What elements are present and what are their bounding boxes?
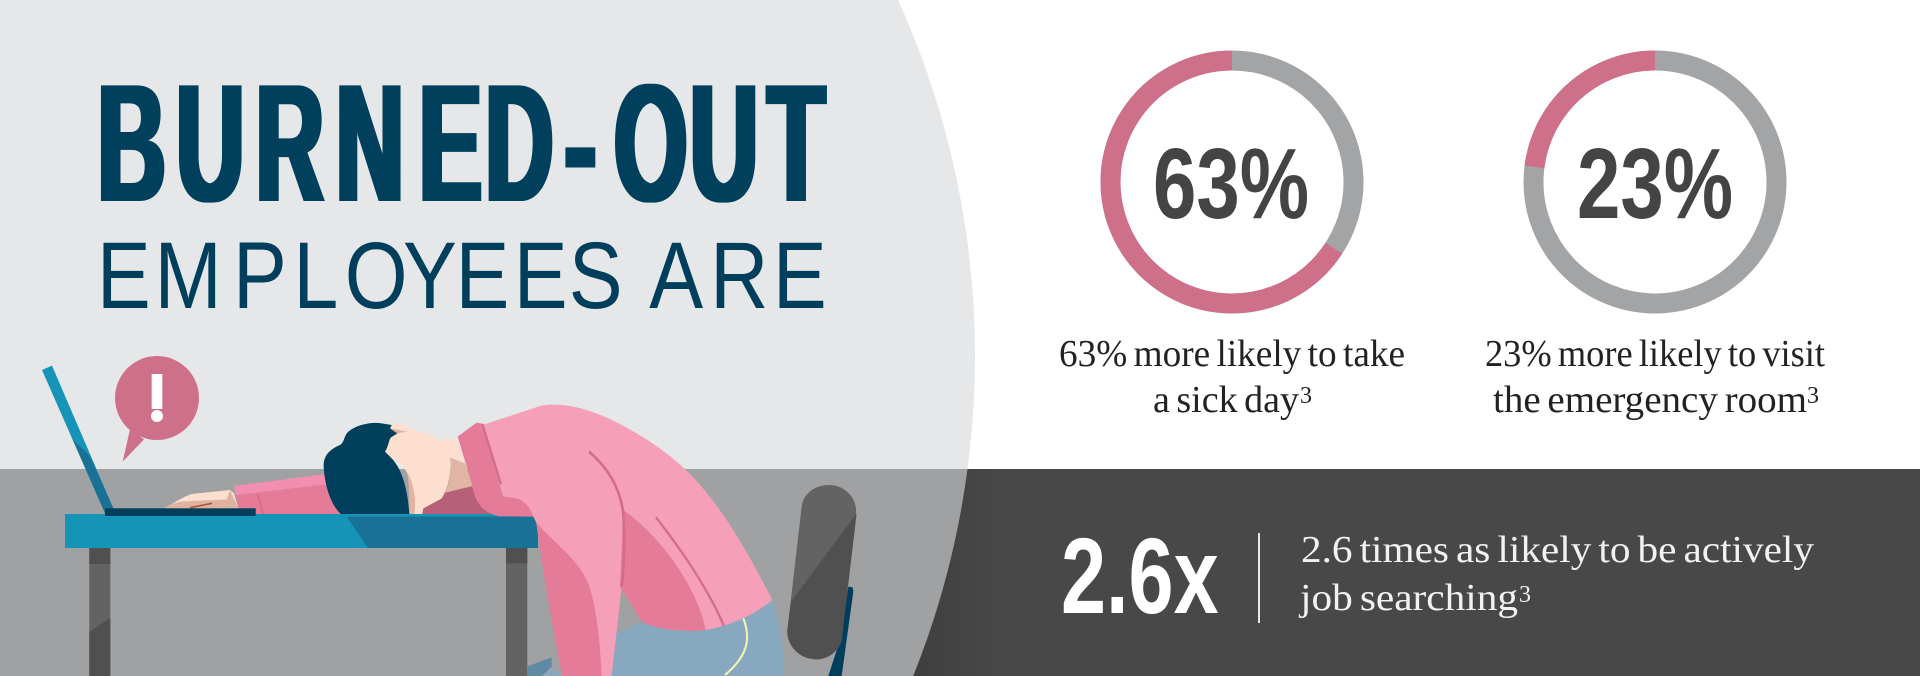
- heading: burned-out: BURNED-OUT: [98, 49, 825, 237]
- label: job searching: [1298, 529, 1814, 619]
- stat: 2.6x: 2.6x: [1061, 517, 1219, 637]
- heading: employees are: EMPLOYEES ARE: [97, 222, 827, 328]
- label: sick day: 3: [1300, 383, 1312, 409]
- divider: [1258, 533, 1260, 623]
- label: emergency room: 23% more likely to visit: [1485, 333, 1825, 375]
- jeans: [527, 600, 783, 676]
- panel: dark bottom band: [0, 469, 1920, 676]
- icon: laptop screen: [42, 366, 113, 513]
- label: sick day: [1059, 333, 1405, 421]
- label: emergency room: 3: [1807, 383, 1819, 409]
- desk legs: [89, 548, 527, 676]
- label: emergency room: the emergency room: [1493, 379, 1807, 421]
- title: [97, 49, 827, 328]
- number: 23%: 23%: [1577, 129, 1733, 240]
- stat: 23% ring: [1534, 60, 1776, 304]
- icon: chair: [787, 485, 857, 676]
- label: sick day: a sick day: [1153, 379, 1299, 421]
- panel: grey floor inside circle: [0, 469, 968, 676]
- jacket: [458, 405, 772, 676]
- label: sick day: 63% more likely to take: [1059, 333, 1405, 375]
- label: emergency room: [1485, 333, 1825, 421]
- jacket and jeans: [458, 405, 783, 676]
- arm and hand: [165, 471, 347, 516]
- label: job searching: 2.6 times as likely to be actively: [1301, 529, 1814, 571]
- laptop base: [105, 508, 256, 516]
- stat: 63% ring: [1110, 60, 1354, 304]
- label: job searching: 3: [1519, 582, 1531, 608]
- illustration: burned-out worker at desk: [42, 356, 857, 676]
- icon: alert speech bubble: [115, 356, 199, 462]
- panel: light grey circle background: [0, 0, 975, 469]
- number: 63%: 63%: [1153, 129, 1309, 240]
- desk top: [65, 514, 538, 548]
- label: job searching: job searching: [1298, 577, 1518, 619]
- head and neck: [324, 423, 495, 516]
